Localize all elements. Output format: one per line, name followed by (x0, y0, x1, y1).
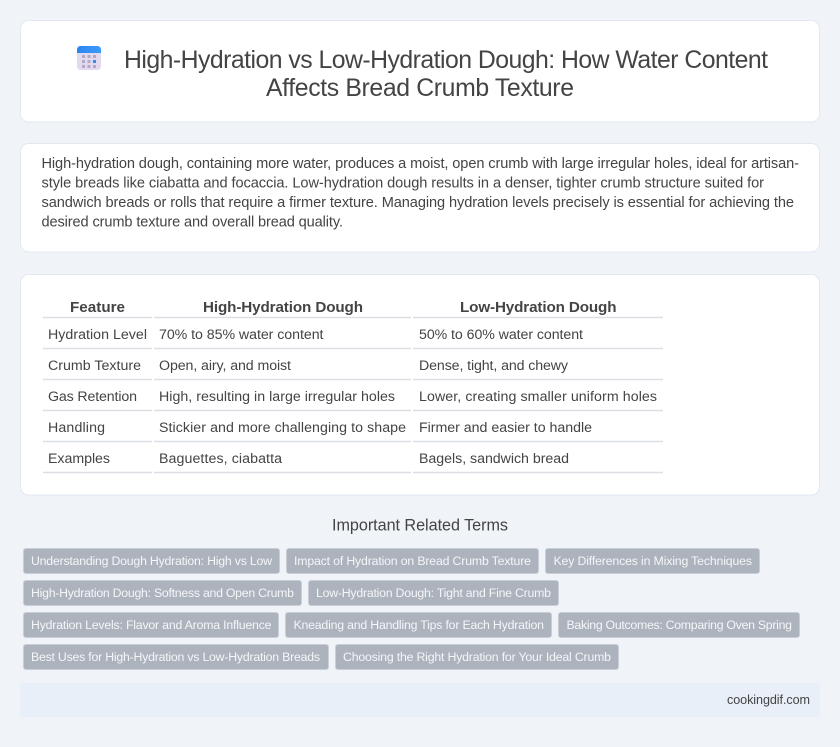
tag list (24, 548, 800, 670)
tag: High-Hydration Dough: Softness and Open Crumb (31, 586, 294, 600)
tag: Baking Outcomes: Comparing Oven Spring (566, 618, 792, 632)
tag: Key Differences in Mixing Techniques (554, 554, 752, 568)
tag: Kneading and Handling Tips for Each Hydration (294, 618, 544, 632)
text block: description: sandwich breads or rolls that require a firmer texture. Managing hydration levels precisely is essential for achieving the (42, 195, 794, 211)
table header (70, 299, 616, 316)
tag (24, 644, 328, 670)
tag: Understanding Dough Hydration: High vs Low (31, 554, 272, 568)
tag (546, 548, 760, 574)
table row: gas retention: Lower, creating smaller uniform holes (419, 389, 657, 405)
table row: hydration level: Hydration Level (48, 327, 147, 343)
table row: crumb texture: Dense, tight, and chewy (419, 358, 569, 374)
table row: hydration level (48, 327, 583, 343)
table row: examples: Bagels, sandwich bread (419, 451, 569, 467)
text block: description: style breads like ciabatta and focaccia. Low-hydration dough results in a denser, tighter crumb structure suited for (42, 176, 764, 192)
table header: Feature (70, 299, 125, 316)
panel: comparison table (20, 274, 820, 495)
panel: description (20, 144, 820, 252)
tag (558, 612, 800, 638)
heading: important related terms: Important Related Terms (332, 516, 508, 534)
text block: description: desired crumb texture and overall bread quality. (42, 214, 343, 230)
tag: Best Uses for High-Hydration vs Low-Hydration Breads (31, 650, 320, 664)
tag (336, 644, 618, 670)
tag (286, 548, 538, 574)
tag: Impact of Hydration on Bread Crumb Texture (294, 554, 531, 568)
table row: gas retention: Gas Retention (48, 389, 137, 405)
table row: examples (48, 451, 569, 467)
table row: handling: Firmer and easier to handle (419, 420, 592, 436)
tag (24, 612, 278, 638)
tag: Low-Hydration Dough: Tight and Fine Crumb (316, 586, 551, 600)
title (124, 47, 768, 102)
table row: examples: Examples (48, 451, 110, 467)
tag: Hydration Levels: Flavor and Aroma Influence (31, 618, 272, 632)
table row: examples: Baguettes, ciabatta (159, 451, 282, 467)
panel: header (20, 20, 820, 122)
tag (24, 548, 280, 574)
text block: description: High-hydration dough, containing more water, produces a moist, open crumb with large irregular holes, ideal for artisan- (42, 156, 799, 172)
table row: handling: Handling (48, 420, 105, 436)
table row: hydration level: 50% to 60% water content (419, 327, 583, 343)
table row: crumb texture: Crumb Texture (48, 358, 141, 374)
table row: crumb texture (48, 358, 569, 374)
table row: gas retention (48, 389, 657, 405)
table row: crumb texture: Open, airy, and moist (159, 358, 291, 374)
text block: description (42, 156, 799, 230)
table row: gas retention: High, resulting in large irregular holes (159, 389, 395, 405)
table row lines (43, 318, 663, 472)
tag: Choosing the Right Hydration for Your Ideal Crumb (343, 650, 611, 664)
table row: handling: Stickier and more challenging to shape (159, 420, 406, 436)
title: Affects Bread Crumb Texture (266, 75, 574, 102)
title: High-Hydration vs Low-Hydration Dough: How Water Content (124, 47, 768, 74)
footer (20, 683, 820, 717)
tag (24, 580, 302, 606)
table header: High-Hydration Dough (203, 299, 363, 316)
table row: handling (48, 420, 592, 436)
table header: Low-Hydration Dough (460, 299, 616, 316)
tag (308, 580, 558, 606)
table row: hydration level: 70% to 85% water content (159, 327, 324, 343)
tag (286, 612, 552, 638)
icon: calendar (77, 46, 101, 70)
footer source text: cookingdif.com (727, 693, 810, 707)
